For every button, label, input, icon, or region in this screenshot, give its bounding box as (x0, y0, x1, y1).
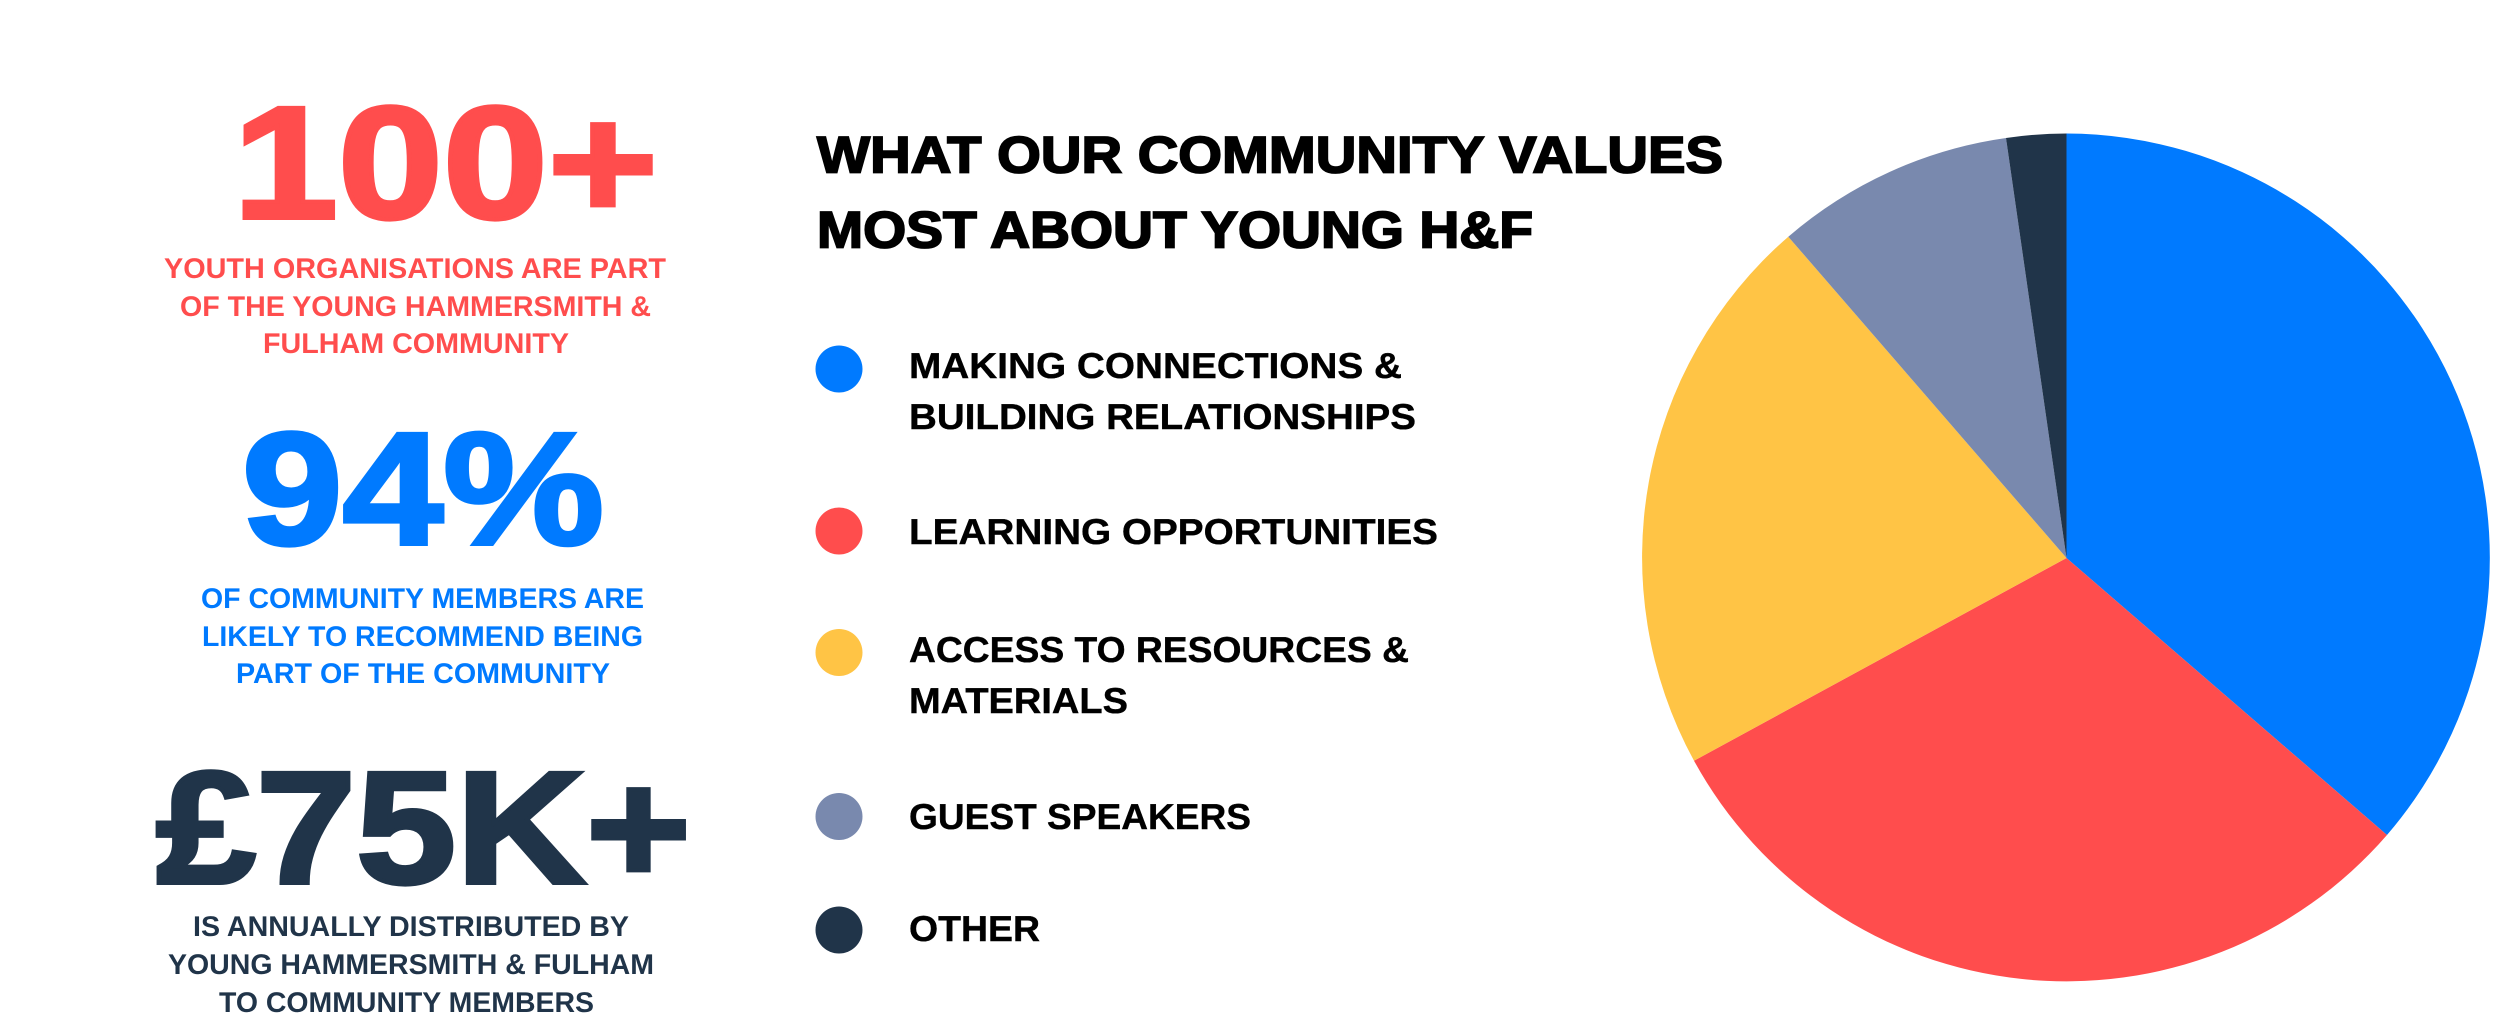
big number: £75K+: £75K+ (156, 738, 691, 917)
legend item: access to resources: ACCESS TO RESOURCES & (909, 629, 1409, 670)
slice: guest speakers (1788, 138, 2066, 558)
legend item: guest speakers (816, 793, 1251, 840)
legend item: other: OTHER (909, 908, 1040, 949)
big number: 94%: 94% (242, 399, 604, 578)
stat description: recommendation (201, 583, 644, 690)
legend item: access to resources: MATERIALS (909, 680, 1128, 721)
legend item: learning opportunities (816, 508, 1438, 554)
stat description: youth organisations: OF THE YOUNG HAMMERSMITH & (180, 291, 651, 323)
big number: 100+: 100+ (233, 73, 658, 252)
panel: stat 100+ youth organisations (164, 73, 667, 360)
pie chart (1642, 134, 2490, 981)
stat description: distribution: TO COMMUNITY MEMBERS (219, 987, 594, 1019)
heading: what our community values: MOST ABOUT YOUNG H&F (817, 200, 1533, 258)
stat description: recommendation: OF COMMUNITY MEMBERS ARE (201, 583, 644, 615)
slice: access to resources (1642, 237, 2066, 761)
stat description: distribution: IS ANNUALLY DISTRIBUTED BY (193, 911, 629, 943)
slice: other (2006, 134, 2066, 558)
stat description: recommendation: LIKELY TO RECOMMEND BEING (202, 621, 643, 653)
slice: making connections (2066, 134, 2490, 835)
panel: stat £75K+ distributed (156, 738, 691, 1019)
legend item: other (816, 906, 1040, 954)
slice: learning opportunities (1694, 558, 2387, 981)
panel: stat 94% recommend (201, 399, 644, 690)
legend item: making connections: MAKING CONNECTIONS & (909, 345, 1402, 386)
legend (816, 345, 1438, 954)
legend item: access to resources (816, 629, 1409, 721)
heading: what our community values (817, 126, 1723, 258)
stat description: distribution: YOUNG HAMMERSMITH & FULHAM (168, 949, 654, 981)
heading: what our community values: WHAT OUR COMMUNITY VALUES (817, 126, 1723, 184)
stat description: youth organisations: YOUTH ORGANISATIONS ARE PART (164, 253, 667, 285)
stat description: distribution (168, 911, 654, 1019)
stat description: recommendation: PART OF THE COMMUNITY (236, 658, 610, 690)
legend item: making connections (816, 345, 1416, 437)
legend item: making connections: BUILDING RELATIONSHIPS (909, 396, 1416, 437)
stat description: youth organisations: FULHAM COMMUNITY (263, 328, 569, 360)
legend item: learning opportunities: LEARNING OPPORTUNITIES (909, 511, 1438, 552)
legend item: guest speakers: GUEST SPEAKERS (909, 796, 1251, 837)
stat description: youth organisations (164, 253, 667, 360)
